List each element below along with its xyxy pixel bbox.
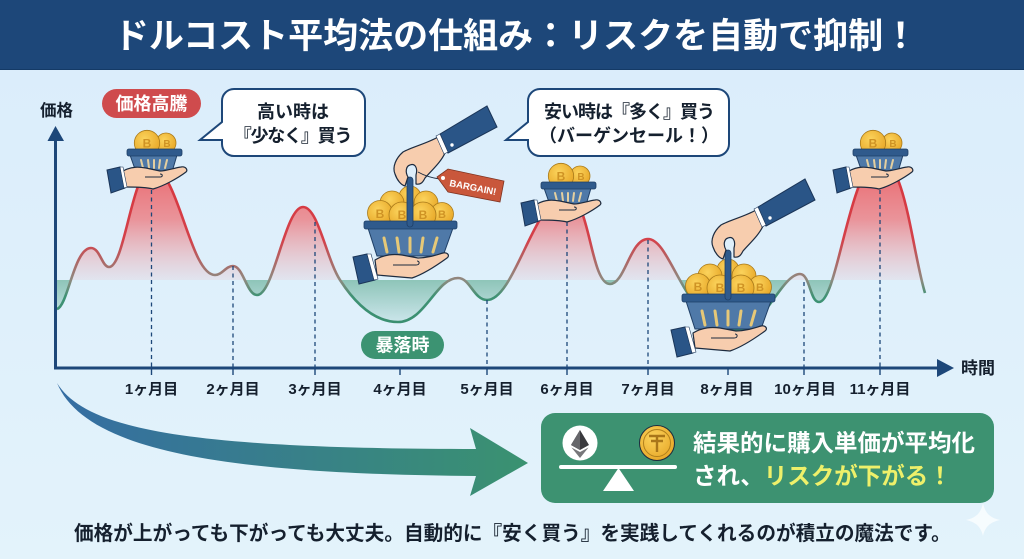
icon: sparkle	[966, 503, 1000, 536]
icon: bargain price tag	[418, 169, 504, 202]
x axis month labels	[125, 381, 910, 398]
text: result message	[693, 429, 975, 489]
callout: buy less when high: 高い時は	[257, 102, 329, 122]
tag: price surge	[102, 89, 201, 118]
tag: crash: 暴落時	[376, 336, 430, 356]
icon: large basket with two hands, month 4	[353, 106, 497, 284]
icon: hand holding small basket, month 6	[521, 163, 601, 226]
x axis month labels: 7ヶ月目	[621, 381, 675, 398]
icon: bargain price tag: BARGAIN!	[448, 178, 497, 198]
y axis label: 価格	[40, 101, 74, 120]
x axis month labels: 2ヶ月目	[206, 381, 260, 398]
arrow: curved to result	[57, 383, 528, 496]
line chart: price curve	[57, 160, 925, 368]
text: result message: 結果的に購入単価が平均化	[693, 429, 975, 456]
x axis month labels: 10ヶ月目	[774, 381, 836, 398]
callout: buy less when high: 『少なく』買う	[234, 126, 351, 146]
icon: large basket with two hands, month 8	[671, 179, 815, 357]
text: bottom caption: 価格が上がっても下がっても大丈夫。自動的に『安く買う』を実践してくれるのが積立の魔法です。	[74, 522, 951, 545]
x axis month labels: 5ヶ月目	[460, 381, 514, 398]
title banner: ドルコスト平均法の仕組み：リスクを自動で抑制！	[114, 17, 918, 56]
axes	[48, 126, 954, 377]
text: result message: され、リスクが下がる！	[693, 462, 952, 489]
callout: buy less when high	[200, 89, 365, 156]
callout: buy more when low: 安い時は『多く』買う	[544, 101, 714, 122]
callout: buy more when low	[506, 89, 729, 156]
tag: crash	[361, 331, 444, 359]
x axis month labels: 8ヶ月目	[700, 381, 754, 398]
x axis month labels: 1ヶ月目	[125, 381, 178, 398]
x axis month labels: 4ヶ月目	[373, 381, 427, 398]
x axis month labels: 3ヶ月目	[288, 381, 342, 398]
icon: hand holding small basket, month 11	[833, 130, 913, 193]
x axis month labels: 11ヶ月目	[850, 381, 910, 398]
x axis label: 時間	[961, 359, 995, 378]
panel: result	[541, 413, 994, 503]
icon: hand holding small basket, month 1	[107, 130, 187, 193]
tag: price surge: 価格高騰	[116, 94, 188, 114]
title banner	[0, 0, 1024, 70]
icon: balance scale with coins	[559, 426, 677, 491]
callout: buy more when low: （バーゲンセール！）	[539, 126, 719, 146]
x axis month labels: 6ヶ月目	[540, 381, 594, 398]
